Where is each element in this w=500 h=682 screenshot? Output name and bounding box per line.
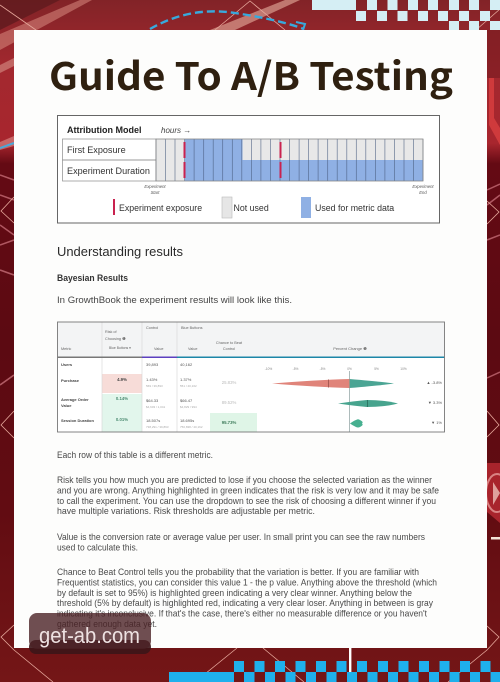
row labels: Experiment Duration (67, 166, 150, 176)
risk cells: green (102, 394, 142, 432)
checker pattern: bottom (169, 661, 500, 682)
risk cell: red (102, 374, 142, 393)
percent change axis: -10% (265, 367, 272, 371)
results table (58, 322, 444, 432)
value columns (146, 362, 194, 423)
row labels (61, 362, 94, 423)
watermark badge (29, 613, 151, 654)
chance values: 95.73% (222, 420, 236, 425)
value columns: $64.33 (146, 398, 159, 403)
paragraph: chance to beat control (57, 567, 437, 629)
risk values (116, 377, 128, 422)
paragraph: risk: Risk tells you how much you are predicted to lose if you choose the selected variation as the winner (57, 475, 432, 485)
percent change axis: 10% (400, 367, 407, 371)
header labels: Choosing ❶ (105, 337, 126, 341)
header labels: Blue Buttons ▾ (109, 346, 131, 350)
paragraph: risk: have multiple variations. Risk thresholds are adjustable per metric. (57, 506, 315, 516)
value columns: 40,162 (180, 362, 193, 367)
diagram heading: Attribution Model (67, 125, 141, 135)
row labels: Users (61, 362, 73, 367)
percent change axis: -5% (293, 367, 298, 371)
small raw numbers: $4,603 / 1,041 (146, 405, 166, 409)
watermark badge: get-ab.com (39, 623, 140, 648)
small raw numbers: $4,829 / 994 (180, 405, 197, 409)
legend: used for metric data: Used for metric data (315, 203, 394, 213)
exposure markers (184, 142, 282, 178)
timeline grid lines (156, 139, 423, 181)
experiment start label: Start (151, 190, 160, 195)
legend: experiment exposure: Experiment exposure (119, 203, 202, 213)
small raw numbers (146, 384, 203, 429)
value columns: 1.43% (146, 377, 158, 382)
chance cell: green (210, 413, 257, 432)
header labels: Percent Change ❶ (333, 346, 367, 351)
timeline grid: used for metric data (185, 139, 423, 181)
row labels: Session Duration (61, 418, 94, 423)
header labels: Control (146, 326, 158, 330)
paragraph: chance to beat control: by default is set to 95%) is highlighted green indicating a very clear winner. Anything below the (57, 588, 412, 598)
percent change labels: ▲ -3.8% (426, 380, 442, 385)
paragraph: chance to beat control: gathered enough data yet. (57, 619, 157, 629)
header labels: Value (154, 347, 163, 351)
legend: not used: Not used (234, 203, 269, 213)
legend: not used (222, 197, 269, 218)
chance values (222, 380, 236, 425)
legend: used for metric data (301, 197, 394, 218)
row labels: First Exposure (67, 145, 126, 155)
table header background (58, 322, 444, 357)
intro text: In GrowthBook the experiment results will look like this. (57, 295, 292, 305)
chance values: 25.83% (222, 380, 236, 385)
legend: experiment exposure (113, 199, 202, 215)
paragraph: risk (57, 475, 439, 516)
header accent lines (58, 356, 444, 358)
row labels: Value (61, 403, 72, 408)
percent change axis: -5% (320, 367, 325, 371)
column dividers (102, 322, 177, 432)
risk values: 0.01% (116, 417, 128, 422)
header labels: Metric (61, 347, 71, 351)
risk values: 4.9% (117, 377, 127, 382)
percent change labels: ▼ 1% (431, 420, 442, 425)
percent change axis: 5% (374, 367, 379, 371)
small raw numbers: 738,291 / 39,893 (146, 425, 169, 429)
paragraph: value: Value is the conversion rate or average value per user. In small print you can see the raw numbers (57, 532, 426, 542)
row labels: Purchase (61, 378, 80, 383)
value columns: 39,893 (146, 362, 159, 367)
percent change labels: ▼ 3.3% (428, 400, 442, 405)
small raw numbers: 569 / 39,893 (146, 384, 163, 388)
chance values: 89.52% (222, 400, 236, 405)
percent change labels (426, 380, 442, 425)
value columns: 18.507s (146, 418, 160, 423)
paragraph: risk: to call the experiment. You can use the dropdown to see the risk of choosing a different winner if you (57, 496, 436, 506)
header labels: Chance to Beat (216, 341, 243, 345)
header labels: Control (223, 347, 235, 351)
hours axis label: hours → (161, 126, 191, 135)
table border (58, 322, 444, 432)
experiment end label: Experiment (412, 184, 434, 189)
paragraph: risk: and you are wrong. Anything highlighted in green indicates that the risk is very low and it may be safe (57, 486, 439, 496)
violin: purchase (272, 379, 394, 388)
header labels: Blue Buttons (181, 326, 203, 330)
section heading: Understanding results (57, 244, 183, 259)
row labels (62, 139, 423, 181)
small raw numbers: 750,838 / 40,162 (180, 425, 203, 429)
attribution model diagram (58, 116, 440, 223)
zero reference line (348, 371, 350, 432)
paragraph: value (57, 532, 426, 552)
percent change axis (265, 367, 407, 371)
paragraph: each row: Each row of this table is a different metric. (57, 450, 213, 460)
percent change axis: 0% (347, 367, 352, 371)
paragraph: chance to beat control: threshold (5% by default) is highlighted red, indicating a very clear loser. Anything in between is gray (57, 598, 434, 608)
subheading: Bayesian Results (57, 273, 128, 283)
paragraph: chance to beat control: indicating it's inconclusive. If that's the case, there's either no measurable difference or you haven't (57, 608, 428, 618)
paragraph: value: used to calculate this. (57, 542, 138, 552)
risk values: 0.14% (116, 396, 128, 401)
value columns: $66.47 (180, 398, 193, 403)
paragraph: chance to beat control: Frequentist statistics, you can consider this value 1 - the p value. Anything above the threshold (which (57, 578, 437, 588)
header labels: Value (188, 347, 197, 351)
value columns: 18.695s (180, 418, 194, 423)
header labels: Risk of (105, 330, 118, 334)
title: Guide To A/B Testing (49, 46, 453, 101)
violin: session duration (350, 419, 363, 428)
row labels: Average Order (61, 397, 89, 402)
small raw numbers: 551 / 40,162 (180, 384, 197, 388)
checker pattern: top right (312, 0, 500, 30)
paragraph: chance to beat control: Chance to Beat Control tells you the probability that the variation is better. If you are familiar with (57, 567, 419, 577)
experiment end label: End (419, 190, 427, 195)
violin: average order value (338, 400, 398, 407)
value columns: 1.37% (180, 377, 192, 382)
timeline grid: not used cells (156, 139, 423, 181)
header labels (61, 326, 367, 351)
experiment start label: Experiment (144, 184, 166, 189)
